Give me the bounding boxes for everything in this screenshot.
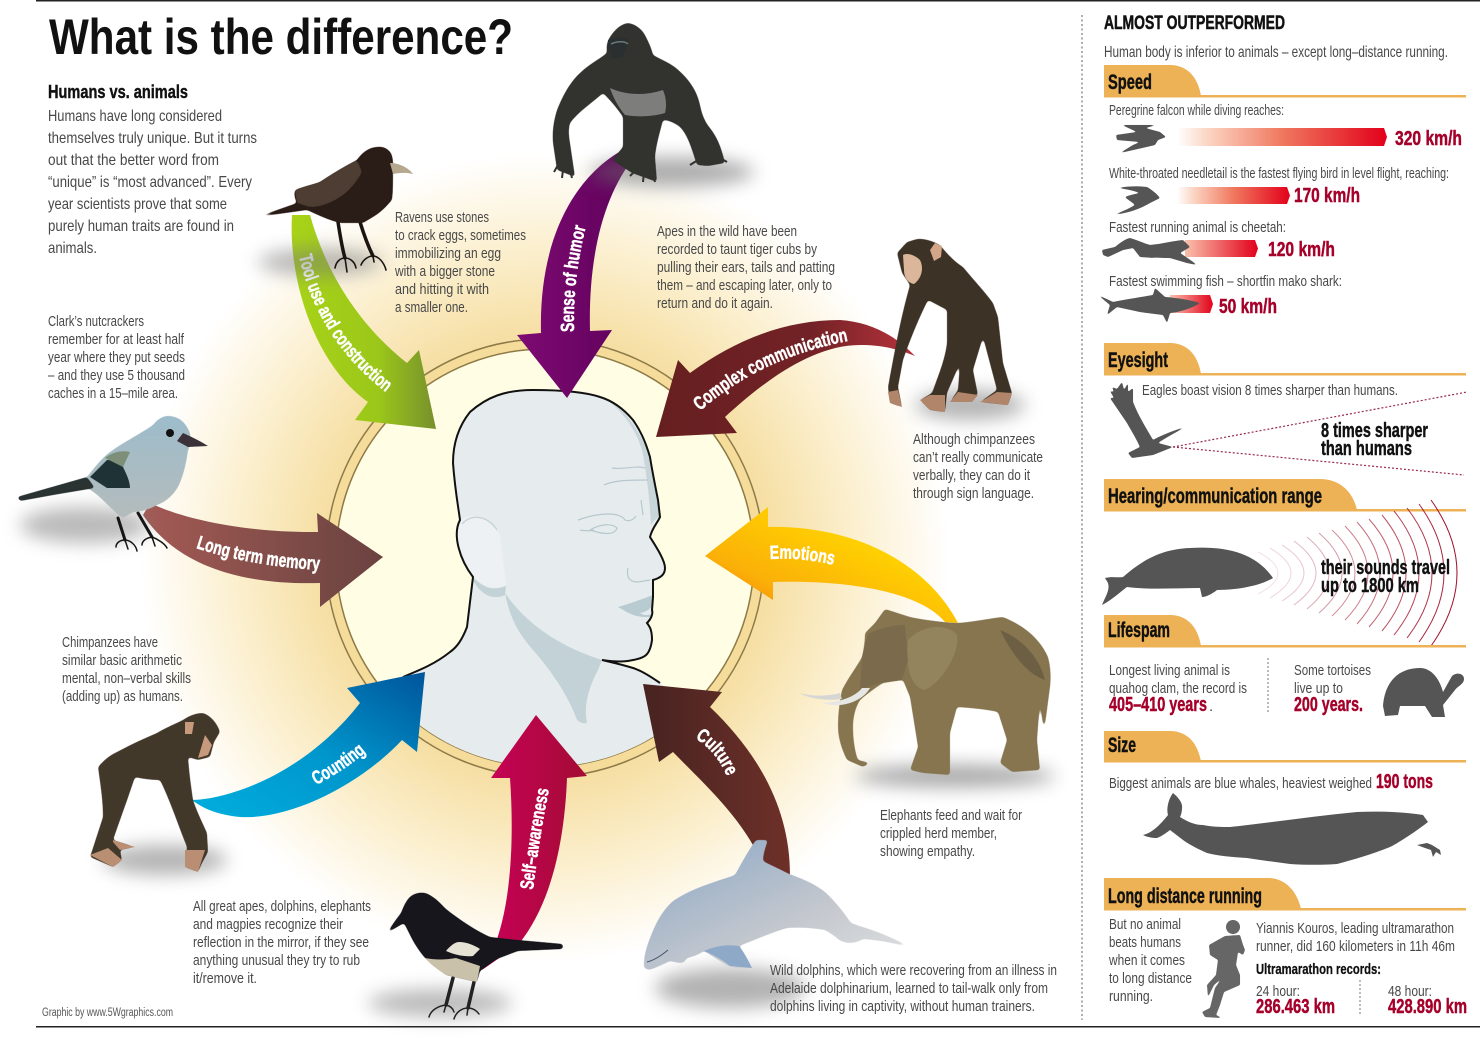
caption: chimpanzee communication [913, 431, 1043, 502]
caption: mirror recognition: All great apes, dolphins, elephants [193, 898, 371, 915]
section: hearing [1102, 479, 1466, 646]
section: lifespan: . [1209, 698, 1213, 715]
caption: apes: pulling their ears, tails and patting [657, 259, 835, 276]
section: lifespan: live up to [1294, 680, 1343, 697]
panel: almost outperformed [1098, 13, 1467, 1018]
arrow: long term memory: Long term memory [196, 536, 320, 574]
caption: nutcrackers: caches in a 15–mile area. [48, 385, 178, 402]
caption: mirror recognition: it/remove it. [193, 970, 257, 987]
caption: chimpanzee arithmetic: Chimpanzees have [62, 634, 158, 651]
section: long distance running: Long distance running [1108, 885, 1262, 908]
caption: nutcrackers: Clark’s nutcrackers [48, 313, 144, 330]
section: size: 190 tons [1376, 771, 1433, 793]
section: lifespan: 405–410 years [1109, 694, 1207, 716]
caption: elephants [880, 807, 1022, 860]
caption: elephants: Elephants feed and wait for [880, 807, 1022, 824]
section: long distance running: 24 hour: [1256, 983, 1300, 1000]
caption: ravens: with a bigger stone [394, 263, 495, 280]
section: size [1104, 731, 1466, 865]
caption: chimpanzee arithmetic: similar basic arithmetic [62, 652, 182, 669]
arrow: sense of humor [517, 152, 626, 398]
caption: apes [657, 223, 835, 312]
caption: dolphins: Adelaide dolphinarium, learned to tail-walk only from [770, 980, 1048, 997]
section: long distance running: But no animal [1109, 916, 1181, 933]
section: lifespan: Longest living animal is [1109, 662, 1230, 679]
icon: needletail [1113, 186, 1160, 215]
arrow: culture: Culture [697, 729, 736, 775]
caption: dolphins: Wild dolphins, which were recovering from an illness in [770, 962, 1057, 979]
caption: chimpanzee communication: can’t really communicate [913, 449, 1043, 466]
column divider [1081, 15, 1083, 1020]
top rule [36, 0, 1480, 2]
section: hearing: Hearing/communication range [1108, 485, 1322, 508]
caption: mirror recognition: anything unusual they try to rub [193, 952, 360, 969]
section: speed [1098, 65, 1466, 323]
arrow: emotions [705, 507, 958, 623]
caption: elephants: crippled herd member, [880, 825, 997, 842]
arrow: complex communication [656, 320, 915, 437]
caption: nutcrackers [48, 313, 185, 402]
caption: chimpanzee communication: verbally, they can do it [913, 467, 1031, 484]
caption: ravens: Ravens use stones [395, 209, 489, 226]
bar: falcon speed [1177, 128, 1387, 146]
bar: needletail speed [1177, 187, 1290, 204]
caption: dolphins [770, 962, 1057, 1015]
section: lifespan: Lifespam [1108, 619, 1170, 642]
icon: shark [1098, 288, 1200, 323]
icon: nutcracker bird [17, 416, 208, 551]
section: long distance running: running. [1109, 988, 1153, 1005]
caption: ravens: a smaller one. [395, 299, 468, 316]
section: eyesight: than humans [1321, 438, 1412, 460]
caption: apes: recorded to taunt tiger cubs by [657, 241, 817, 258]
caption: apes: Apes in the wild have been [657, 223, 797, 240]
arrow: culture [643, 684, 790, 874]
ear [457, 516, 506, 588]
section: long distance running: Ultramarathon records: [1256, 961, 1381, 978]
arrow: tool use and construction: Tool use and construction [300, 252, 391, 392]
caption: mirror recognition: reflection in the mirror, if they see [193, 934, 369, 951]
section: speed: 320 km/h [1395, 128, 1462, 150]
bar: shark speed [1170, 295, 1213, 313]
caption: nutcrackers: – and they use 5 thousand [48, 367, 185, 384]
arrow: self-awareness [482, 715, 587, 970]
caption: apes: them – and escaping later, only to [657, 277, 832, 294]
human head [402, 389, 666, 764]
arrow: self-awareness: Self–awareness [520, 788, 549, 890]
caption: ravens: and hitting it with [395, 281, 489, 298]
section: long distance running: 48 hour: [1388, 983, 1432, 1000]
icon: eagle [1110, 382, 1185, 458]
icon: runner [1202, 920, 1245, 1018]
ear rim [462, 517, 497, 530]
intro text: humans vs animals: “unique” is “most advanced”. Every [48, 174, 252, 191]
section: eyesight [1104, 343, 1467, 475]
credit: Graphic by www.5Wgraphics.com [42, 1007, 173, 1019]
intro text: humans vs animals [48, 82, 257, 257]
sound waves [1258, 500, 1457, 646]
section: speed: 120 km/h [1268, 239, 1335, 261]
section: eyesight: Eyesight [1108, 349, 1168, 372]
section: long distance running: to long distance [1109, 970, 1192, 987]
caption: chimpanzee communication: Although chimpanzees [913, 431, 1035, 448]
section: speed: Speed [1108, 71, 1152, 94]
caption: chimpanzee arithmetic [62, 634, 191, 705]
caption: dolphins: dolphins living in captivity, without human trainers. [770, 998, 1035, 1015]
caption: nutcrackers: remember for at least half [48, 331, 185, 348]
caption: nutcrackers: year where they put seeds [48, 349, 185, 366]
icon: magpie [368, 893, 563, 1019]
panel heading: ALMOST OUTPERFORMED [1104, 13, 1285, 34]
background glow [0, 0, 1075, 1026]
section: speed: Fastest swimming fish – shortfin mako shark: [1109, 273, 1342, 290]
intro text: humans vs animals: themselves truly unique. But it turns [48, 130, 257, 147]
section: eyesight: 8 times sharper [1321, 420, 1428, 442]
section: speed: 170 km/h [1294, 185, 1360, 207]
icon: diver [1417, 843, 1441, 857]
intro text: humans vs animals: year scientists prove that some [48, 196, 227, 213]
icon: falcon [1116, 125, 1166, 153]
section: lifespan: quahog clam, the record is [1109, 680, 1247, 697]
bottom rule [36, 1026, 1480, 1028]
section: lifespan: 200 years. [1294, 694, 1363, 716]
intro text: humans vs animals: out that the better word from [48, 152, 219, 169]
section: hearing: up to 1800 km [1321, 575, 1419, 597]
section: long distance running: 286.463 km [1256, 996, 1335, 1018]
icon: dolphin [644, 840, 909, 1008]
arrow: tool use and construction [292, 215, 436, 429]
section: speed: Fastest running animal is cheetah: [1109, 219, 1286, 236]
icon: chimpanzee with long arms [888, 239, 1025, 420]
caption: elephants: showing empathy. [880, 843, 975, 860]
caption: chimpanzee communication: through sign language. [913, 485, 1034, 502]
caption: mirror recognition: and magpies recognize their [193, 916, 343, 933]
head shading: neck [505, 593, 602, 723]
caption: ravens: to crack eggs, sometimes [395, 227, 526, 244]
arrow: complex communication: Complex communication [694, 331, 848, 409]
arrow: sense of humor: Sense of humor [560, 224, 586, 332]
icon: whale [1102, 548, 1273, 605]
head outline [403, 390, 665, 683]
section: eyesight: Eagles boast vision 8 times sharper than humans. [1142, 382, 1398, 399]
icon: tortoise [1383, 668, 1464, 717]
section: speed: Peregrine falcon while diving reaches: [1109, 102, 1284, 119]
intro text: humans vs animals: purely human traits are found in [48, 218, 234, 235]
caption: ravens [394, 209, 526, 316]
section: size: Biggest animals are blue whales, heaviest weighed [1109, 775, 1372, 792]
vision cone [1173, 392, 1467, 475]
icon: raven [257, 147, 413, 276]
ear shadow [473, 577, 506, 597]
title: What is the difference? [49, 9, 513, 65]
intro text: humans vs animals: Humans have long considered [48, 108, 222, 125]
bar: cheetah speed [1185, 240, 1258, 257]
arrow: counting: Counting [312, 744, 367, 784]
caption: mirror recognition [193, 898, 371, 987]
caption: apes: return and do it again. [657, 295, 773, 312]
caption: chimpanzee arithmetic: mental, non–verbal skills [62, 670, 191, 687]
section: lifespan: Some tortoises [1294, 662, 1371, 679]
section: size: Size [1108, 734, 1136, 757]
intro text: humans vs animals: animals. [48, 240, 97, 257]
icon: cheetah [1102, 238, 1197, 265]
section: speed: 50 km/h [1219, 296, 1277, 318]
section: long distance running [1104, 878, 1467, 1018]
icon: blue whale [1143, 793, 1428, 865]
intro text: humans vs animals: Humans vs. animals [48, 82, 188, 102]
section: long distance running: when it comes [1108, 952, 1185, 969]
arrow: long term memory [143, 506, 383, 607]
central ring [326, 339, 764, 777]
section: lifespan [1104, 615, 1466, 717]
arrow: emotions: Emotions [770, 545, 834, 564]
caption: chimpanzee arithmetic: (adding up) as humans. [62, 688, 183, 705]
icon: gorilla [553, 23, 754, 187]
caption: ravens: immobilizing an egg [395, 245, 501, 262]
arrow: counting [193, 672, 425, 818]
facial lines [578, 467, 650, 582]
section: long distance running: beats humans [1109, 934, 1181, 951]
icon: chimpanzee stooping [90, 713, 227, 875]
lips [618, 595, 653, 617]
head shading: crown [604, 398, 660, 526]
icon: elephant [799, 609, 1055, 787]
